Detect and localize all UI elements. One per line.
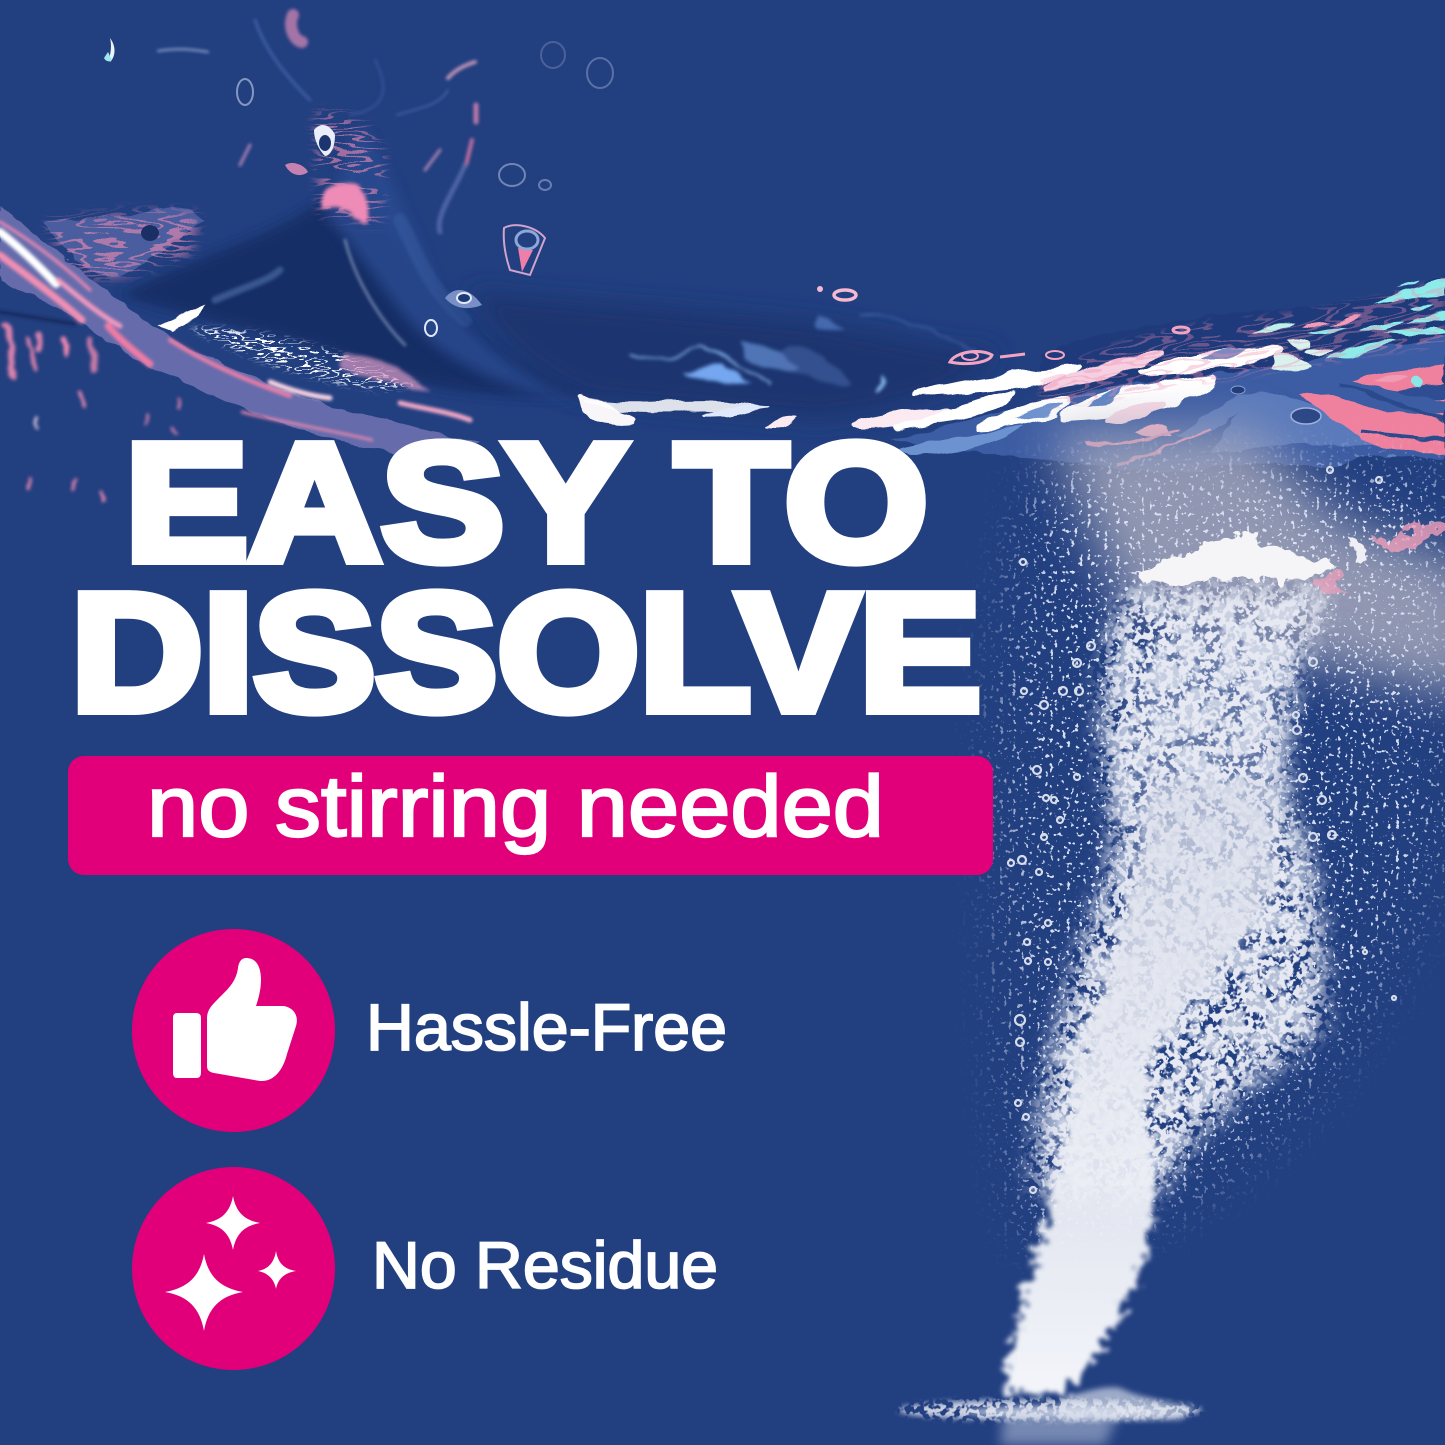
plume mid bubbles	[1018, 576, 1340, 1212]
title: EASY TO	[125, 410, 928, 596]
surface highlights	[580, 275, 1445, 472]
plume outer bubbles	[961, 434, 1445, 1269]
dark water wedge	[120, 198, 600, 396]
ribbon lines	[0, 222, 470, 440]
pink ring cluster	[950, 327, 1189, 364]
water tone	[890, 325, 1445, 472]
dark centre water	[470, 290, 1000, 420]
splash pink mass	[322, 184, 369, 226]
blue panels	[1212, 392, 1380, 453]
base glow	[965, 1406, 1165, 1418]
splash texture	[307, 108, 393, 231]
bubbles	[1008, 467, 1396, 1193]
icon: thumbs up	[132, 929, 335, 1132]
icon: sparkles	[132, 1167, 335, 1370]
plume fog	[1031, 398, 1445, 724]
title: DISSOLVE	[71, 560, 981, 746]
label: no residue: No Residue	[372, 1228, 718, 1302]
splash eye	[314, 125, 335, 156]
lump texture	[40, 204, 206, 286]
splash mid tone	[325, 130, 590, 405]
streak contours right	[1036, 276, 1445, 411]
pink mass	[1298, 362, 1445, 453]
label: hassle-free: Hassle-Free	[366, 990, 727, 1064]
water surface wave	[0, 7, 1445, 504]
cyan highlights	[1372, 280, 1445, 303]
water droplets	[104, 38, 1321, 424]
blue centre ripples	[630, 313, 975, 393]
splash strands	[158, 15, 476, 345]
pink flecks	[1300, 322, 1330, 329]
subtitle banner: no stirring needed	[147, 759, 884, 855]
fine web	[188, 323, 420, 394]
white flash	[158, 305, 208, 332]
base wedge foam	[1060, 1387, 1196, 1420]
title	[71, 410, 981, 746]
base foam	[896, 1395, 1205, 1424]
lower reflection	[1000, 1410, 1120, 1445]
pink web strip	[340, 352, 432, 392]
ribbon	[0, 205, 480, 462]
surface foam	[1130, 535, 1335, 585]
left splatter	[5, 325, 180, 500]
white highlights	[580, 349, 1278, 427]
effervescent plume	[896, 398, 1445, 1445]
feature: hassle-free	[132, 929, 727, 1132]
subtitle banner	[68, 756, 993, 875]
upper core haze	[1125, 632, 1285, 1000]
foam pink flecks	[1310, 520, 1445, 595]
plume core	[998, 772, 1282, 1402]
plume mid clouds	[1019, 577, 1340, 1202]
feature: no residue	[132, 1167, 718, 1370]
foam lump	[45, 209, 205, 280]
